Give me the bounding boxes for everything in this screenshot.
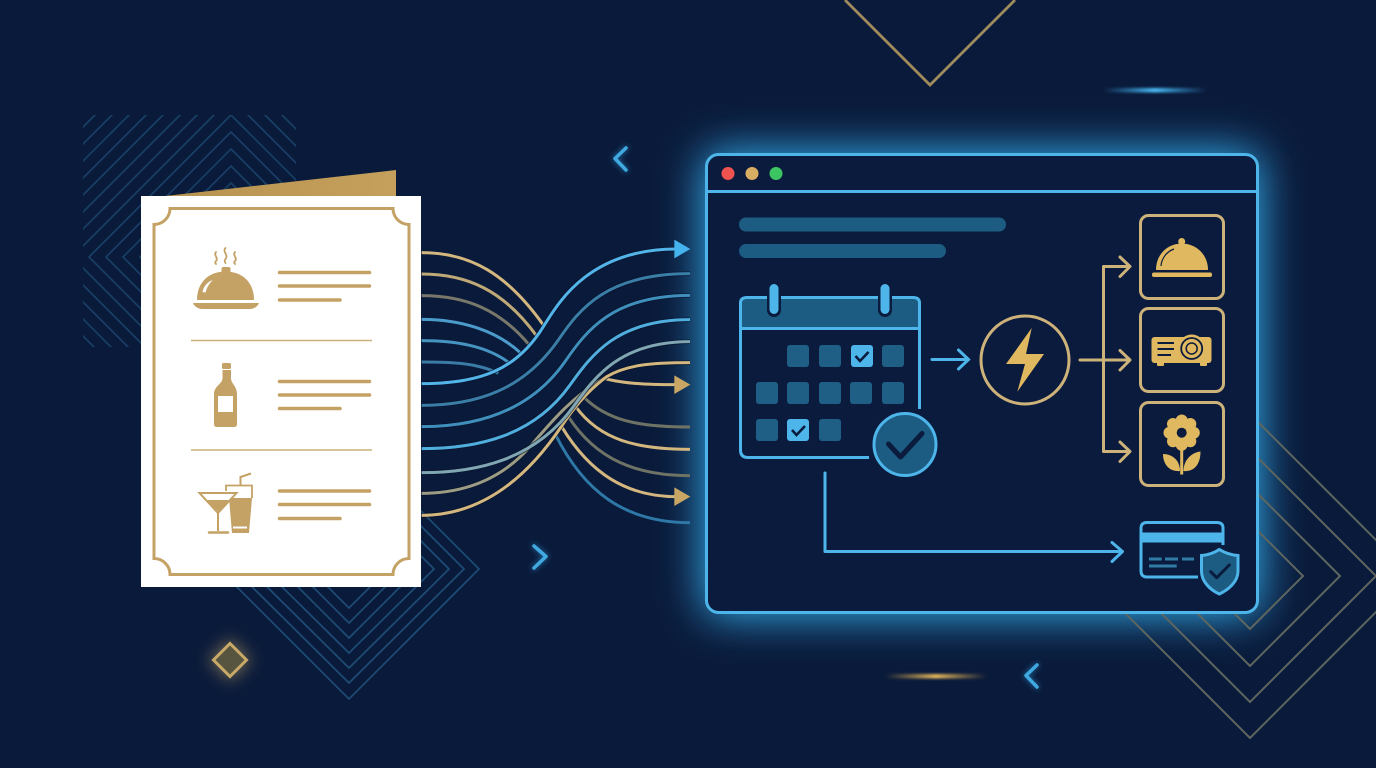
text lines: item 3 [280,491,370,518]
icon: cocktail and soft drink [197,474,252,533]
calendar [740,283,936,476]
option box: projector [1140,308,1224,392]
small chevron: bottom centre [534,546,546,568]
option box: flowers [1140,402,1224,486]
icon: steaming cloche [193,248,259,309]
placeholder heading bars [739,218,1006,258]
decorative top chevron [845,0,1015,85]
flow: crossing lines, gold [422,363,690,515]
panel: booking window [706,154,1258,612]
icon: lightning bolt in circle [981,316,1069,404]
calendar day cells [756,345,904,441]
selected day [787,419,809,441]
pattern: top-left concentric diamonds [83,115,296,347]
window glow [704,152,1260,615]
window control dots [722,167,782,180]
icon: wine bottle [214,363,237,427]
arrowhead: gold middle [674,375,690,394]
flow: lines emerging on the right [556,378,690,523]
icon: gold diamond [208,638,252,682]
selected day [851,345,873,367]
arrowhead: blue [674,240,690,258]
arrow: calendar to bolt [932,350,968,369]
small chevron: below window [1026,665,1037,687]
confirmation badge [874,414,936,476]
branching gold arrows [1080,257,1130,462]
panel: menu back cover [165,170,396,196]
pattern: lower blue concentric diamonds [219,439,479,699]
arrowhead: gold lower [674,487,690,506]
icon: credit card with shield [1141,522,1238,594]
panel: printed menu [141,196,421,587]
text lines: item 2 [280,382,370,408]
flow: crossing lines, blue [422,249,690,473]
calendar rings [767,283,892,317]
option box: catering [1140,216,1224,298]
light streak: blue [1103,88,1207,92]
menu ornamental frame [154,208,409,574]
flow: lines leaving the menu and passing behind [422,253,543,373]
text lines: item 1 [280,272,370,300]
arrow: calendar to payment [825,473,1122,562]
light streak: gold [885,674,987,678]
small chevron: upper left of window [615,148,626,170]
pattern: lower right gold concentric diamonds [1088,414,1376,738]
flow lines: menu to booking window [422,240,690,523]
